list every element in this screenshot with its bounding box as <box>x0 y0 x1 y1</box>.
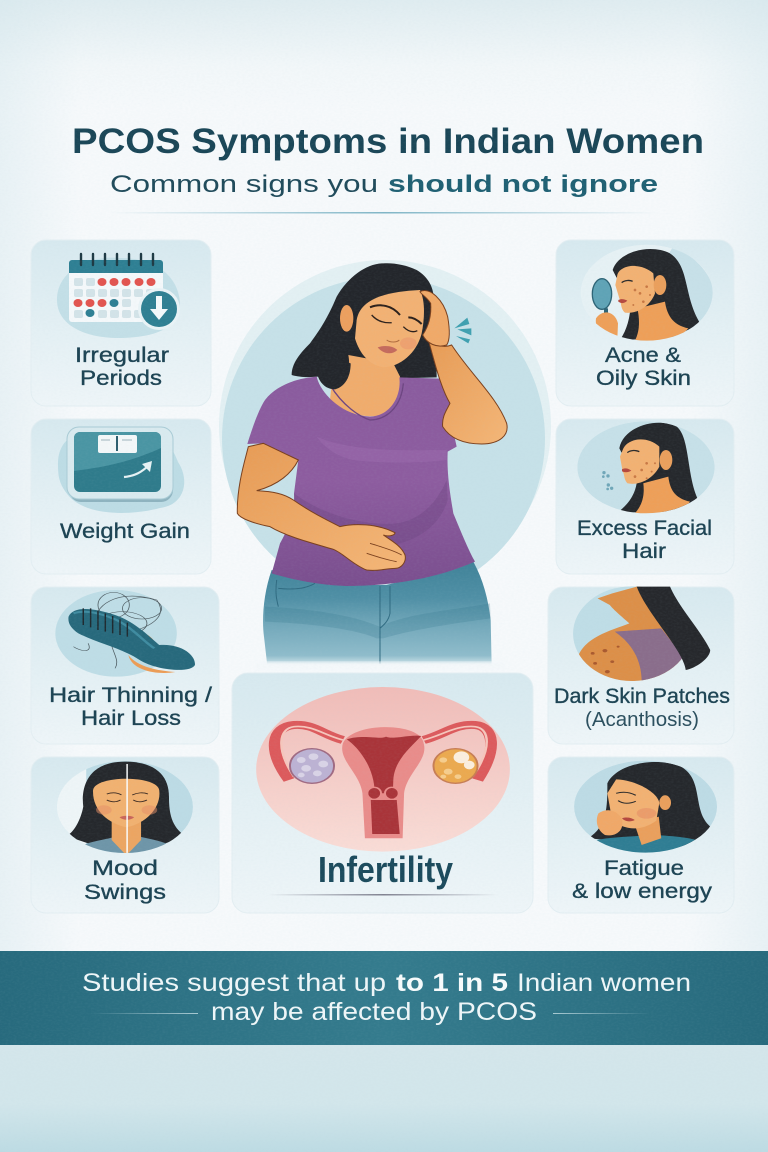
label: infertility: Infertility <box>318 849 453 890</box>
label: dark skin patches: Dark Skin Patches <box>554 684 730 708</box>
icon: woman profile <box>577 421 715 515</box>
panel: excess facial hair <box>556 419 734 574</box>
panel: irregular periods <box>31 240 211 406</box>
hand on head <box>420 291 449 346</box>
label: acne and oily skin: Oily Skin <box>596 366 691 390</box>
icon: calendar <box>57 254 180 338</box>
label: irregular periods <box>75 343 169 390</box>
label: hair thinning: Hair Loss <box>81 706 181 730</box>
subtitle: should not ignore <box>388 171 658 198</box>
pain lines <box>454 318 471 343</box>
label: mood swings <box>84 856 166 904</box>
banner <box>0 951 768 1045</box>
lower arm and hand on belly <box>237 443 405 570</box>
label: fatigue: & low energy <box>572 879 712 903</box>
backdrop circle <box>219 260 551 600</box>
panel: weight gain <box>31 419 211 574</box>
icon: uterus and ovaries <box>256 687 510 852</box>
title: PCOS Symptoms in Indian Women <box>72 122 704 161</box>
label: fatigue: Fatigue <box>604 856 684 880</box>
raised arm <box>428 340 507 444</box>
label: hair thinning <box>49 683 212 730</box>
woman figure <box>237 263 507 666</box>
label: acne and oily skin <box>596 343 691 390</box>
icon: scale <box>58 427 184 513</box>
banner text: Indian women <box>517 969 691 997</box>
panel: hair thinning <box>31 587 219 744</box>
panel: acne and oily skin <box>556 240 734 406</box>
label: hair thinning: Hair Thinning / <box>49 683 212 707</box>
face <box>355 290 424 367</box>
subtitle <box>110 171 658 198</box>
banner text: to 1 in 5 <box>396 969 508 997</box>
label: dark skin patches <box>554 684 730 731</box>
icon: woman with mirror <box>581 245 713 343</box>
panel: dark skin patches <box>548 586 734 744</box>
panel: mood swings <box>31 757 219 913</box>
icon: mood swings face <box>57 761 193 855</box>
label: dark skin patches: (Acanthosis) <box>585 709 699 731</box>
label: irregular periods: Irregular <box>75 343 169 367</box>
banner text: Studies suggest that up <box>82 969 386 997</box>
label: excess facial hair: Hair <box>622 539 666 563</box>
hair <box>292 263 437 380</box>
label: excess facial hair <box>577 516 712 563</box>
central illustration: woman in pain <box>219 260 551 670</box>
hair lock over shirt <box>317 357 351 389</box>
icon: shoulder with dark patches <box>573 586 710 682</box>
neck <box>330 355 403 416</box>
label: irregular periods: Periods <box>80 366 162 390</box>
panel: fatigue <box>548 757 734 913</box>
panel: infertility <box>232 673 533 913</box>
banner text <box>82 969 691 1026</box>
icon: tired woman <box>574 761 717 855</box>
shirt <box>247 377 475 586</box>
label: fatigue <box>572 856 712 903</box>
label: excess facial hair: Excess Facial <box>577 516 712 540</box>
label: acne and oily skin: Acne & <box>605 343 681 367</box>
banner text: may be affected by PCOS <box>211 998 537 1026</box>
label: weight gain: Weight Gain <box>60 519 190 543</box>
jeans fade edge <box>255 662 505 670</box>
jeans <box>263 562 492 666</box>
label: mood swings: Swings <box>84 880 166 904</box>
label: mood swings: Mood <box>92 856 158 880</box>
subtitle: Common signs you <box>110 171 378 198</box>
icon: hairbrush with hair <box>55 590 195 677</box>
